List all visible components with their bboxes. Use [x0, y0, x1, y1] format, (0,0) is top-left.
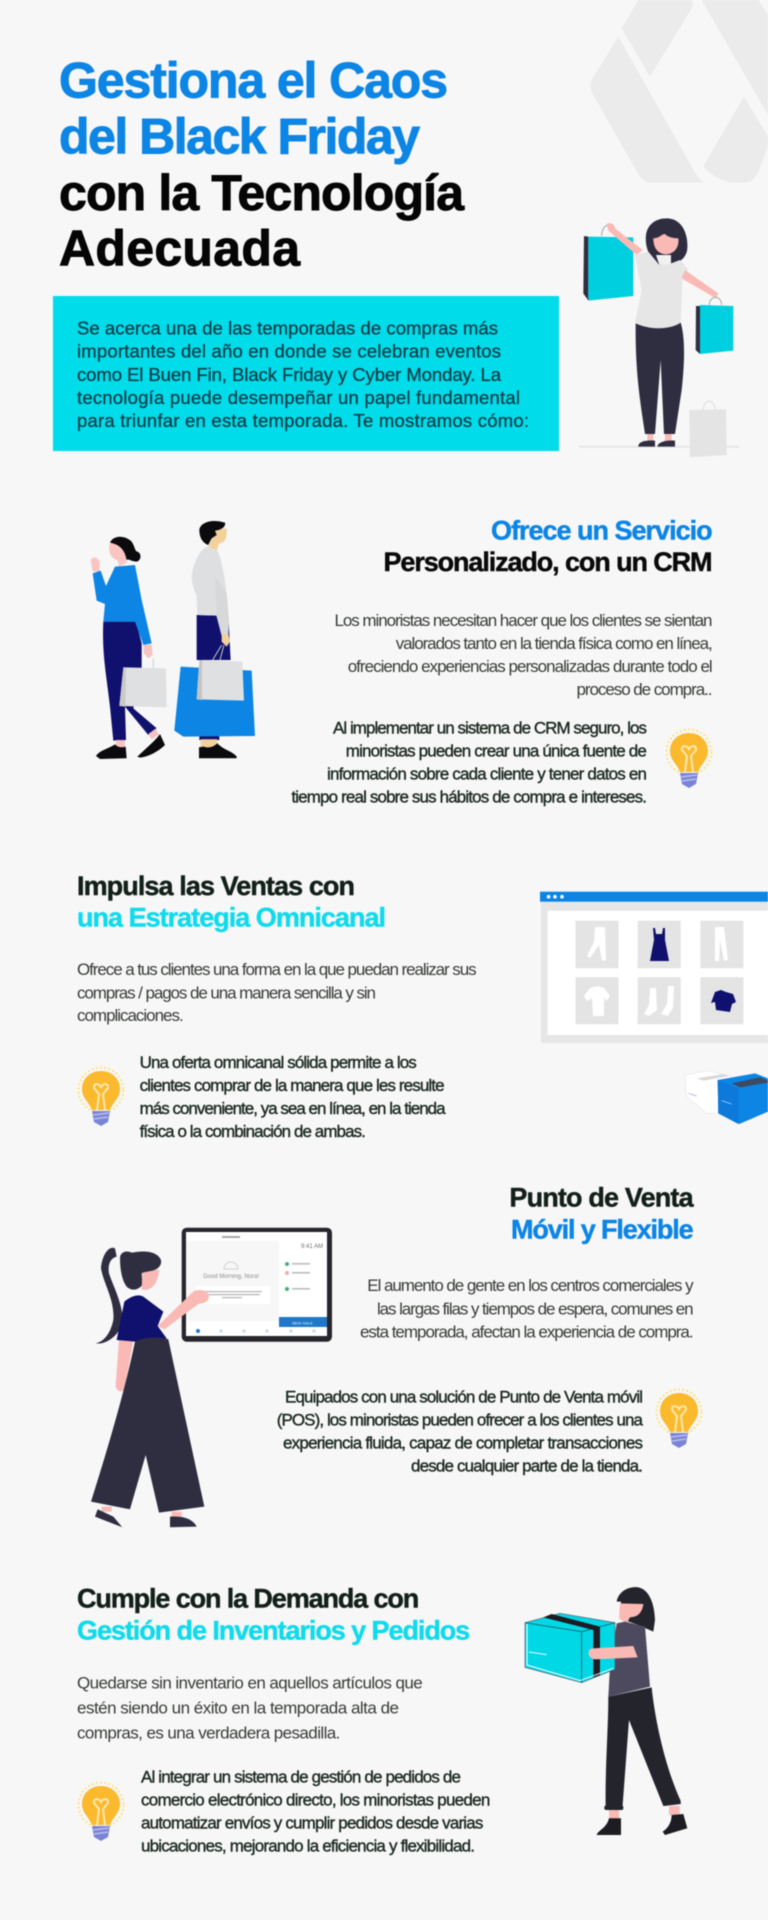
section 4 tip: Al integrar un sistema de gestión de pedidos de: [141, 1767, 461, 1786]
intro panel: tecnología puede desempeñar un papel fundamental: [77, 387, 520, 408]
section 3 tip: [277, 1387, 644, 1475]
section 2 tip: física o la combinación de ambas.: [140, 1122, 366, 1141]
section 3 paragraph: El aumento de gente en los centros comerciales y: [367, 1276, 694, 1295]
section 1 paragraph: ofreciendo experiencias personalizadas durante todo el: [348, 657, 713, 676]
section 3 paragraph: esta temporada, afectan la experiencia de compra.: [360, 1322, 694, 1341]
section 2 heading: [77, 871, 386, 933]
section 2 heading: una Estrategia Omnicanal: [77, 903, 386, 933]
section 4 paragraph: [77, 1673, 423, 1742]
section 2 tip: [140, 1053, 446, 1141]
intro panel: como El Buen Fin, Black Friday y Cyber Monday. La: [77, 364, 502, 385]
title: con la Tecnología: [59, 165, 465, 221]
section 4 paragraph: Quedarse sin inventario en aquellos artículos que: [77, 1673, 423, 1692]
illustration: couple shopping: [91, 521, 255, 759]
section 1 heading: [384, 515, 713, 577]
title: Adecuada: [59, 221, 301, 277]
intro panel: [53, 296, 559, 451]
illustration: shipping boxes: [685, 1071, 768, 1124]
section 3 heading: [509, 1183, 695, 1244]
section 1 tip: información sobre cada cliente y tener datos en: [327, 764, 647, 783]
section 4 tip: comercio electrónico directo, los minoristas pueden: [141, 1790, 490, 1809]
title: del Black Friday: [59, 108, 420, 164]
section 1 heading: Personalizado, con un CRM: [384, 547, 712, 577]
section 3 paragraph: las largas filas y tiempos de espera, comunes en: [377, 1299, 694, 1318]
section 4 tip: [141, 1767, 490, 1855]
section 3 heading: Móvil y Flexible: [511, 1214, 694, 1244]
woman figure: [91, 537, 167, 759]
section 1 heading: Ofrece un Servicio: [491, 515, 713, 545]
title: [59, 52, 465, 277]
intro panel: importantes del año en donde se celebran eventos: [77, 341, 501, 362]
section 3 tip: desde cualquier parte de la tienda.: [411, 1456, 643, 1475]
section 4 heading: [77, 1584, 470, 1645]
section 3 tip: experiencia fluida, capaz de completar transacciones: [283, 1433, 643, 1452]
section 4 tip: ubicaciones, mejorando la eficiencia y flexibilidad.: [141, 1836, 475, 1855]
illustration: woman with shopping bags: [579, 218, 739, 457]
section 1 tip: [291, 718, 647, 806]
illustration: POS tablet: 9:41 AM: [301, 1244, 323, 1250]
section 2 paragraph: [77, 960, 477, 1025]
section 1 tip: tiempo real sobre sus hábitos de compra e intereses.: [291, 787, 647, 806]
illustration: POS tablet: [182, 1228, 332, 1342]
section 3 heading: Punto de Venta: [509, 1183, 695, 1213]
section 2 paragraph: complicaciones.: [77, 1006, 184, 1025]
illustration: POS tablet: NEW SALE: [292, 1320, 313, 1326]
section 1 paragraph: Los minoristas necesitan hacer que los clientes se sientan: [334, 611, 712, 630]
section 2 paragraph: Ofrece a tus clientes una forma en la que puedan realizar sus: [77, 960, 477, 979]
section 4 paragraph: estén siendo un éxito en la temporada alta de: [77, 1698, 399, 1717]
section 1 tip: Al implementar un sistema de CRM seguro, los: [333, 718, 647, 738]
section 3 tip: Equipados con una solución de Punto de Venta móvil: [285, 1387, 643, 1406]
section 1 tip: minoristas pueden crear una única fuente de: [346, 741, 647, 760]
section 4 tip: automatizar envíos y cumplir pedidos desde varias: [141, 1813, 483, 1832]
icon: light bulb: [78, 1068, 124, 1126]
icon: light bulb: [656, 1390, 702, 1448]
intro panel: para triunfar en esta temporada. Te mostramos cómo:: [77, 410, 529, 431]
section 4 heading: Cumple con la Demanda con: [77, 1584, 419, 1614]
section 2 tip: clientes comprar de la manera que les resulte: [140, 1076, 445, 1095]
illustration: woman using tablet: [91, 1248, 209, 1527]
intro panel: Se acerca una de las temporadas de compras más: [77, 317, 498, 338]
section 4 paragraph: compras, es una verdadera pesadilla.: [77, 1723, 340, 1742]
section 2 paragraph: compras / pagos de una manera sencilla y sin: [77, 983, 376, 1002]
section 2 tip: Una oferta omnicanal sólida permite a los: [140, 1053, 417, 1072]
section 1 paragraph: proceso de compra..: [576, 680, 712, 699]
section 3 tip: (POS), los minoristas pueden ofrecer a los clientes una: [277, 1410, 644, 1429]
illustration: woman carrying box: [525, 1587, 687, 1835]
background logo mark: [590, 0, 768, 183]
illustration: online store browser window: [540, 892, 768, 1043]
section 1 paragraph: [334, 611, 713, 699]
icon: light bulb: [666, 730, 712, 788]
section 2 tip: más conveniente, ya sea en línea, en la tienda: [140, 1099, 446, 1118]
section 4 heading: Gestión de Inventarios y Pedidos: [77, 1615, 470, 1645]
man figure with bags: [174, 521, 255, 758]
section 2 heading: Impulsa las Ventas con: [77, 871, 355, 901]
title: Gestiona el Caos: [59, 52, 448, 108]
section 1 paragraph: valorados tanto en la tienda física como en línea,: [396, 634, 713, 653]
icon: light bulb: [78, 1782, 124, 1841]
section 3 paragraph: [360, 1276, 694, 1341]
illustration: POS tablet: Good Morning, Nora!: [203, 1274, 259, 1280]
